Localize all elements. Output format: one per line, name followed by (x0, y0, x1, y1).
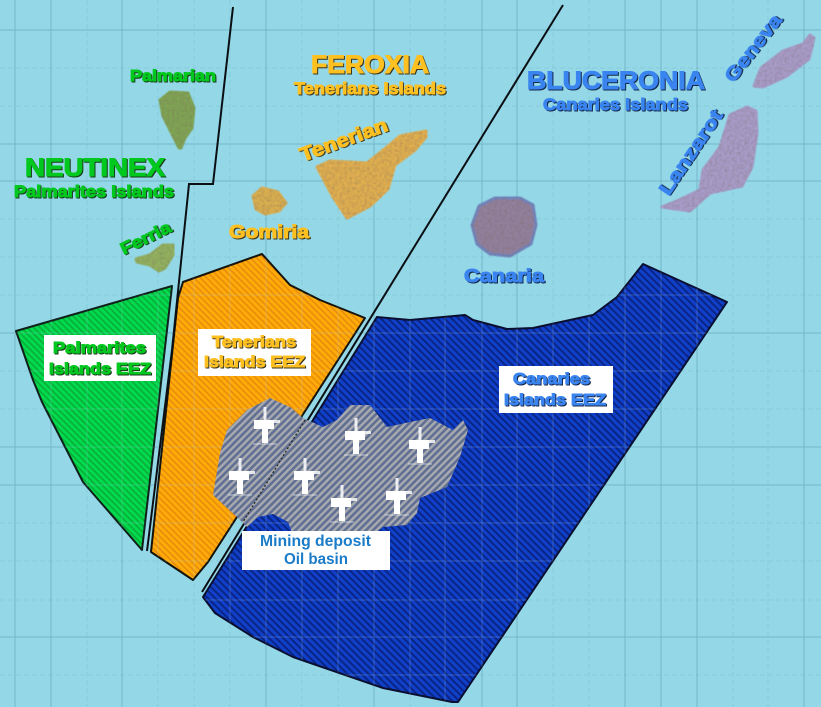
label: Palmarites Islands EEZ (44, 335, 156, 381)
island: Lanzarot (662, 107, 757, 211)
island label: Geneva: Geneva (721, 10, 787, 86)
label: Tenerians Islands EEZ (198, 329, 311, 376)
island label: Ferria: Ferria (117, 217, 175, 258)
label: Tenerians Islands EEZ: Tenerians (212, 334, 296, 351)
label: Tenerians Islands EEZ: Islands EEZ (204, 354, 306, 371)
subheading: Tenerians Islands: Tenerians Islands (294, 80, 446, 98)
icon: oil rig 3 (408, 427, 435, 464)
island label: Lanzarot: Lanzarot (655, 106, 727, 199)
label: Canaries Islands EEZ: Islands EEZ (504, 392, 607, 409)
island: Tenerian (317, 131, 426, 218)
island label: Tenerian: Tenerian (297, 115, 391, 166)
island: Palmarian (160, 92, 194, 148)
subheading: Palmarites Islands: Palmarites Islands (14, 183, 174, 201)
heading: FEROXIA: FEROXIA (311, 51, 429, 79)
heading: FEROXIA (294, 51, 446, 98)
heading: BLUCERONIA (527, 67, 705, 114)
island: Gomiria (253, 188, 286, 214)
heading: NEUTINEX (14, 154, 174, 201)
label: Palmarites Islands EEZ: Palmarites (53, 340, 146, 357)
icon: oil rig 6 (330, 485, 357, 522)
icon: oil rig 4 (228, 458, 255, 496)
icon: oil rig 1 (253, 407, 280, 444)
icon: oil rig 5 (293, 458, 320, 496)
island: Canaria (472, 198, 536, 256)
label: Mining deposit Oil basin (242, 531, 390, 570)
subheading: Canaries Islands: Canaries Islands (543, 96, 688, 114)
island: Ferria (136, 245, 173, 271)
icon: oil rig 2 (344, 418, 371, 456)
heading: BLUCERONIA: BLUCERONIA (527, 67, 705, 95)
island: Geneva (754, 35, 814, 87)
border line: Feroxia / Bluceronia (202, 5, 563, 592)
border line: Neutinex / Feroxia (147, 7, 233, 551)
grid over zones (16, 258, 712, 701)
icon: oil rig 7 (385, 478, 412, 516)
panel: Palmarites EEZ zone (16, 286, 172, 550)
label: Palmarites Islands EEZ: Islands EEZ (49, 361, 152, 378)
island label: Canaria: Canaria (464, 266, 545, 286)
label: Mining deposit Oil basin: Mining deposit (260, 533, 371, 550)
mining deposit area (213, 398, 468, 533)
label: Mining deposit Oil basin: Oil basin (284, 551, 348, 568)
heading: NEUTINEX: NEUTINEX (25, 154, 165, 182)
island label: Palmarian: Palmarian (130, 68, 216, 85)
panel: Canaries EEZ zone (203, 264, 727, 702)
island label: Gomiria: Gomiria (229, 222, 310, 242)
panel: Tenerians EEZ zone (151, 254, 365, 580)
label: Canaries Islands EEZ: Canaries (513, 371, 590, 388)
label: Canaries Islands EEZ (499, 366, 613, 413)
